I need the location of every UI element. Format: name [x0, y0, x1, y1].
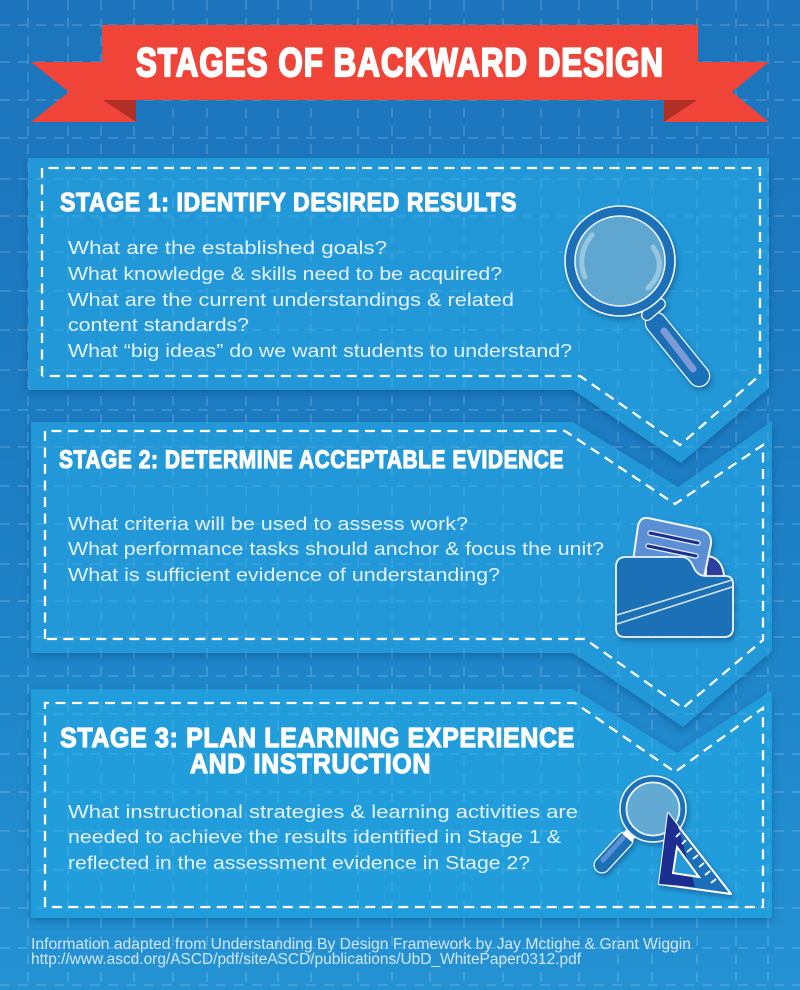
stage 3 dashed border	[45, 703, 763, 907]
icon: folder with papers	[616, 518, 733, 637]
source credit: Information adapted from Understanding By Design Framework by Jay Mctighe & Grant Wiggin	[31, 936, 691, 953]
title: STAGES OF BACKWARD DESIGN	[136, 41, 664, 85]
stage 1 dashed border	[42, 168, 760, 445]
stage 2 questions: What criteria will be used to assess work?	[68, 513, 468, 534]
stage 3 question: What instructional strategies & learning activities are	[68, 801, 578, 822]
icon: magnifying glass and set square	[602, 776, 731, 894]
ribbon left fold	[103, 100, 136, 122]
ribbon main band	[102, 25, 698, 100]
source credit: http://www.ascd.org/ASCD/pdf/siteASCD/publications/UbD_WhitePaper0312.pdf	[31, 951, 582, 968]
stage 1 questions: content standards?	[68, 314, 249, 335]
stage 1 questions	[68, 237, 572, 361]
stage 1 questions: What are the current understandings & related	[68, 289, 514, 310]
stage 3 heading line 2: AND INSTRUCTION	[190, 748, 431, 779]
icon: magnifying glass	[565, 206, 699, 376]
panel: stage 2 background	[31, 421, 772, 727]
stage 3 question: needed to achieve the results identified in Stage 1 &	[68, 826, 562, 847]
stage 1 questions: What “big ideas” do we want students to understand?	[68, 340, 572, 361]
stage 1 questions: What knowledge & skills need to be acquired?	[68, 263, 502, 284]
stage 3 heading line 1: STAGE 3: PLAN LEARNING EXPERIENCE	[60, 722, 575, 753]
stage 2 questions: What is sufficient evidence of understanding?	[68, 564, 500, 585]
ribbon right fold	[664, 100, 697, 122]
stage 2 questions: What performance tasks should anchor & focus the unit?	[68, 538, 604, 559]
stage 2 questions	[68, 513, 604, 585]
ribbon left tail	[31, 62, 136, 122]
stage 2 heading: STAGE 2: DETERMINE ACCEPTABLE EVIDENCE	[59, 446, 564, 474]
source credit	[31, 936, 691, 968]
stage 1 heading: STAGE 1: IDENTIFY DESIRED RESULTS	[60, 187, 517, 217]
panel: stage 3 background	[31, 689, 772, 918]
stage 3 question: reflected in the assessment evidence in Stage 2?	[68, 852, 530, 873]
stage 2 dashed border	[45, 431, 763, 708]
title ribbon	[31, 25, 769, 122]
panel: stage 1 background	[28, 158, 769, 463]
ribbon right tail	[664, 62, 769, 122]
stage 3 question	[68, 801, 578, 873]
stage 1 questions: What are the established goals?	[68, 237, 387, 258]
